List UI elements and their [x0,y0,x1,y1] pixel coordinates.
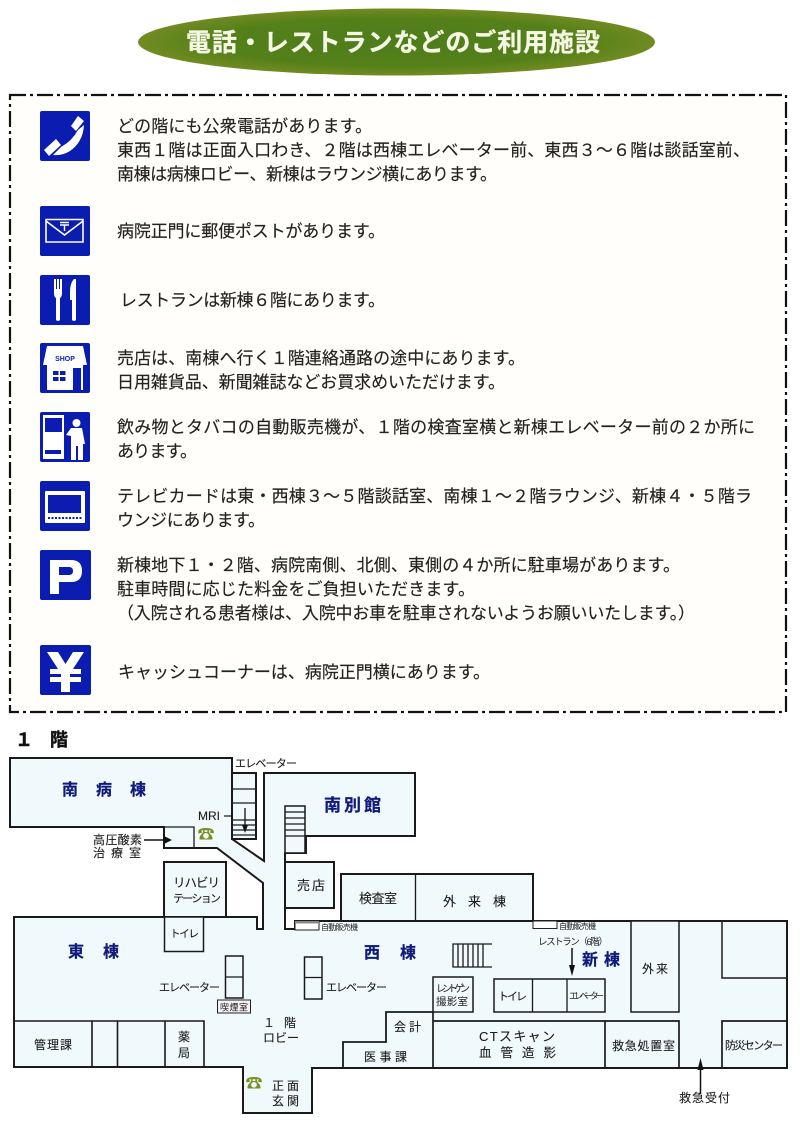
text: vending machine [117,418,755,461]
stairs: south annex [285,806,305,853]
rooms: lower left [14,1021,204,1067]
rooms: accounting and medical affairs: 医事課 [364,1050,407,1064]
heading: new wing: 新棟 [582,950,620,969]
elevator and stairs: south [198,757,297,839]
icon: mail [40,206,90,256]
text: telephone [117,117,750,184]
icon: telephone [40,111,90,161]
text: parking [117,556,695,623]
room: rehabilitation [164,862,226,917]
vending machine marker west [295,921,358,932]
elevators: east: エレベーター [159,981,220,994]
room: x-ray: レントゲン [436,983,470,995]
room: outpatient [631,921,679,1012]
text: shop: 日用雑貨品、新聞雑誌などお買求めいただけます。 [117,373,505,392]
rooms: lower row: 救急処置室 [612,1038,675,1053]
icon: restaurant [40,275,90,325]
text: shop: 売店は、南棟へ行く１階連絡通路の途中にあります。 [117,349,525,368]
text: parking: 駐車時間に応じた料金をご負担いただきます。 [117,580,475,599]
heading: west wing: 西 棟 [364,943,416,962]
text: post: 病院正門に郵便ポストがあります。 [117,222,385,241]
rooms: accounting and medical affairs [343,1012,433,1067]
label: restaurant arrow: レストラン（6階） [538,936,608,948]
panel: facilities [10,95,786,712]
label: restaurant arrow [538,936,608,976]
room: shop [285,862,334,908]
room: x-ray [433,977,473,1012]
text: shop [117,349,525,392]
icon: vending machine [40,412,90,462]
vending machine marker new wing: 自動販売機 [559,921,596,931]
room: hyperbaric oxygen: 治 療 室 [93,846,141,860]
icon: shop: SHOP [55,356,75,363]
text: telephone: 東西１階は正面入口わき、２階は西棟エレベーター前、東西３～６階は談話室前、 [117,141,750,160]
label: emergency reception: 救急受付 [679,1090,730,1105]
text: television card: テレビカードは東・西棟３～５階談話室、南棟１～２階ラウンジ、新棟４・５階ラ [117,487,752,506]
rooms: toilet and elevator new wing [494,979,605,1012]
wing: inspection and outpatient [341,874,533,921]
vending machine marker new wing [533,921,596,931]
heading: first floor: １ 階 [15,730,68,750]
room: rehabilitation: テーション [173,893,221,905]
elevators: west [304,957,387,999]
elevators: west: エレベーター [326,981,387,994]
floor plan [10,757,787,1113]
entrance: 玄関 [272,1094,299,1108]
text: cash corner: キャッシュコーナーは、病院正門横にあります。 [118,663,490,682]
heading: south annex: 南別館 [324,796,381,815]
label: lobby: ロビー [263,1031,299,1045]
rooms: lower left: 薬 [178,1030,190,1044]
text: telephone: どの階にも公衆電話があります。 [117,117,372,136]
text: television card [117,487,752,530]
elevator and stairs: south: MRI [198,809,220,823]
rooms: lower left: 管理課 [34,1037,72,1052]
title [138,8,655,76]
rooms: lower row: 血 管 造 影 [479,1045,556,1060]
stairs: west [453,944,492,967]
entrance [246,1074,299,1108]
entrance: ☎ [246,1074,262,1093]
icon: telephone marker south: ☎ [198,825,214,844]
title: 電話・レストランなどのご利用施設 [186,28,600,57]
icon: yen [40,645,91,695]
rooms: toilet and elevator new wing: トイレ [498,991,527,1003]
rooms: lower row: CTスキャン [479,1029,555,1044]
rooms: lower row: 防災センター [725,1038,783,1052]
text: vending machine: あります。 [117,442,197,461]
rooms: lower row [433,1012,787,1068]
room: east toilet: トイレ [170,928,199,940]
entrance: 正面 [272,1079,299,1093]
text: vending machine: 飲み物とタバコの自動販売機が、１階の検査室横と新棟エレベーター前の２か所に [117,418,755,437]
icon: television [40,481,90,531]
icon: parking [40,550,91,600]
room: smoking: 喫煙室 [220,1002,248,1012]
heading: south ward: 南 病 棟 [62,780,146,799]
room: smoking [218,1000,250,1013]
text: parking: （入院される患者様は、入院中お車を駐車されないようお願いいたします。） [117,604,695,623]
room: north east [722,921,787,978]
room: rehabilitation: リハビリ [173,876,220,890]
room: hyperbaric oxygen: 高圧酸素 [93,833,142,847]
room: shop: 売店 [297,878,325,893]
rooms: toilet and elevator new wing: エレベーター [569,991,604,1001]
vending machine marker west: 自動販売機 [321,922,358,932]
text: telephone: 南棟は病棟ロビー、新棟はラウンジ横にあります。 [117,165,497,184]
wing: inspection and outpatient: 検査室 [359,891,397,906]
rooms: accounting and medical affairs: 会計 [394,1019,421,1034]
text: restaurant: レストランは新棟６階にあります。 [120,291,385,310]
label: lobby: １ 階 [263,1016,296,1030]
label: emergency reception [679,1058,730,1105]
room: east toilet [164,917,204,952]
heading: east wing: 東 棟 [68,942,119,961]
icon: shop [40,343,90,393]
room: x-ray: 撮影室 [436,995,468,1008]
label: lobby [263,1016,299,1045]
elevator and stairs: south: エレベーター [235,757,297,770]
text: television card: ウンジにあります。 [117,511,265,530]
elevators: east [159,956,243,998]
rooms: lower left: 局 [178,1046,190,1060]
room: outpatient: 外来 [642,962,668,976]
text: parking: 新棟地下１・２階、病院南側、北側、東側の４か所に駐車場があります。 [117,556,680,575]
wing: inspection and outpatient: 外 来 棟 [443,894,506,909]
room: hyperbaric oxygen [93,827,194,860]
building: south ward [10,758,787,1113]
